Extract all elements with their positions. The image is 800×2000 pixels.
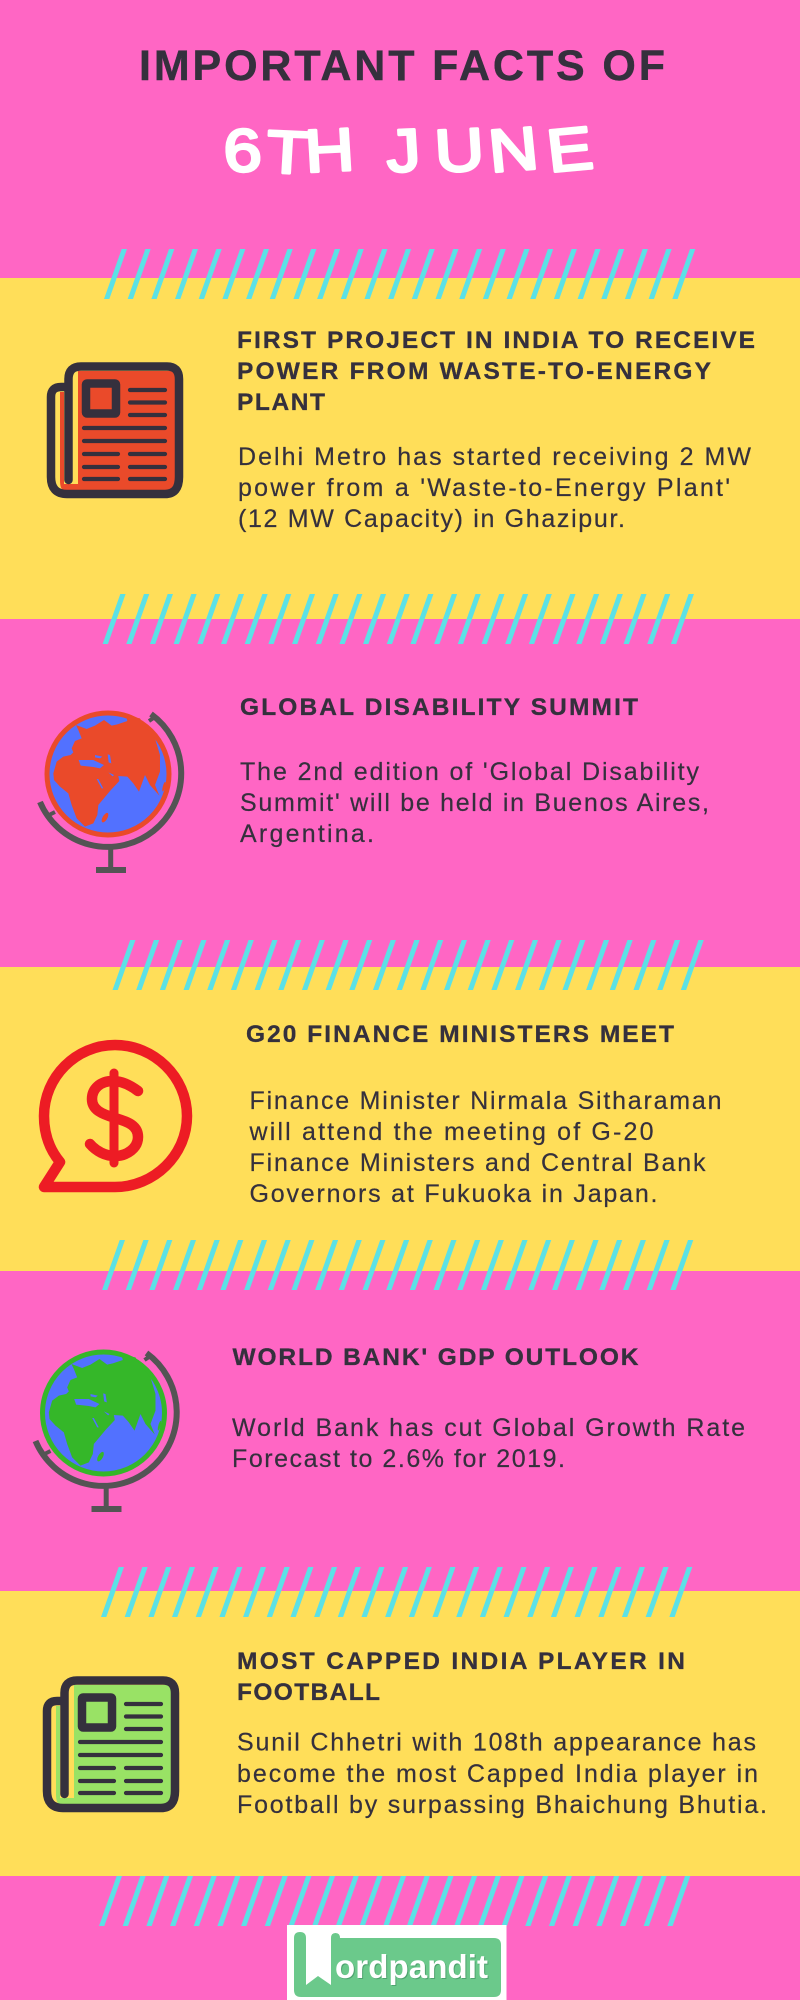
- logo: Wordpandit: [287, 1925, 506, 2000]
- subtitle: 6th June: 6TH JUNE: [222, 114, 596, 187]
- panel: yellow band 3: [0, 967, 800, 1271]
- text block: section 4: World Bank has cut Global Growth Rate: [232, 1414, 745, 1442]
- panel: yellow band 5: [0, 1591, 800, 1876]
- hatch divider 2: [103, 594, 694, 644]
- hatch divider 4: [102, 1240, 693, 1290]
- icon: green newspaper: [47, 1680, 175, 1808]
- heading: section 1: PLANT: [237, 389, 325, 416]
- text block: section 3: will attend the meeting of G-20: [248, 1118, 654, 1146]
- heading: section 1: [237, 327, 755, 416]
- text block: section 5: [237, 1728, 767, 1819]
- text block: section 3: Finance Minister Nirmala Sitharaman: [250, 1087, 722, 1115]
- text block: section 1: [238, 443, 751, 533]
- text block: section 2: Summit' will be held in Buenos Aires,: [240, 789, 709, 817]
- title: IMPORTANT FACTS OF: [139, 42, 665, 90]
- hatch divider 1: [104, 249, 695, 299]
- panel: pink band 2: [0, 619, 800, 967]
- text block: section 2: [240, 758, 709, 848]
- icon: orange globe: [40, 713, 181, 870]
- text block: section 2: The 2nd edition of 'Global Disability: [240, 758, 700, 786]
- text block: section 1: (12 MW Capacity) in Ghazipur.: [238, 505, 625, 533]
- icon: green globe: [36, 1352, 177, 1509]
- text block: section 4: Forecast to 2.6% for 2019.: [232, 1445, 565, 1473]
- heading: section 1: FIRST PROJECT IN INDIA TO RECEIVE: [237, 327, 755, 354]
- icon: dollar speech bubble: [44, 1045, 187, 1187]
- panel: pink band 4: [0, 1271, 800, 1591]
- hatch divider 3: [112, 940, 704, 990]
- heading: section 4: WORLD BANK' GDP OUTLOOK: [232, 1344, 639, 1371]
- text block: section 5: become the most Capped India player in: [237, 1760, 758, 1788]
- heading: section 5: FOOTBALL: [237, 1679, 380, 1706]
- heading: section 3: G20 FINANCE MINISTERS MEET: [246, 1021, 674, 1048]
- panel: yellow band 1: [0, 278, 800, 619]
- text block: section 4: [232, 1414, 745, 1473]
- heading: section 2: GLOBAL DISABILITY SUMMIT: [240, 694, 638, 721]
- text block: section 3: Finance Ministers and Central Bank: [250, 1149, 706, 1177]
- hatch divider 5: [101, 1567, 692, 1617]
- heading: section 5: MOST CAPPED INDIA PLAYER IN: [237, 1648, 685, 1675]
- text block: section 1: power from a 'Waste-to-Energy Plant': [238, 474, 730, 502]
- logo: Wordpandit: ordpandit: [335, 1948, 488, 1985]
- heading: section 1: POWER FROM WASTE-TO-ENERGY: [237, 358, 711, 385]
- hatch divider 6: [99, 1876, 690, 1926]
- text block: section 3: [248, 1087, 722, 1208]
- text block: section 5: Sunil Chhetri with 108th appearance has: [237, 1728, 756, 1756]
- text block: section 5: Football by surpassing Bhaichung Bhutia.: [237, 1791, 767, 1819]
- text block: section 1: Delhi Metro has started receiving 2 MW: [238, 443, 751, 471]
- background: top pink band: [0, 0, 800, 278]
- icon: orange newspaper: [51, 366, 179, 494]
- text block: section 3: Governors at Fukuoka in Japan.: [250, 1180, 658, 1208]
- heading: section 5: [237, 1648, 685, 1706]
- panel: bottom pink band: [0, 1876, 800, 2000]
- text block: section 2: Argentina.: [240, 820, 374, 848]
